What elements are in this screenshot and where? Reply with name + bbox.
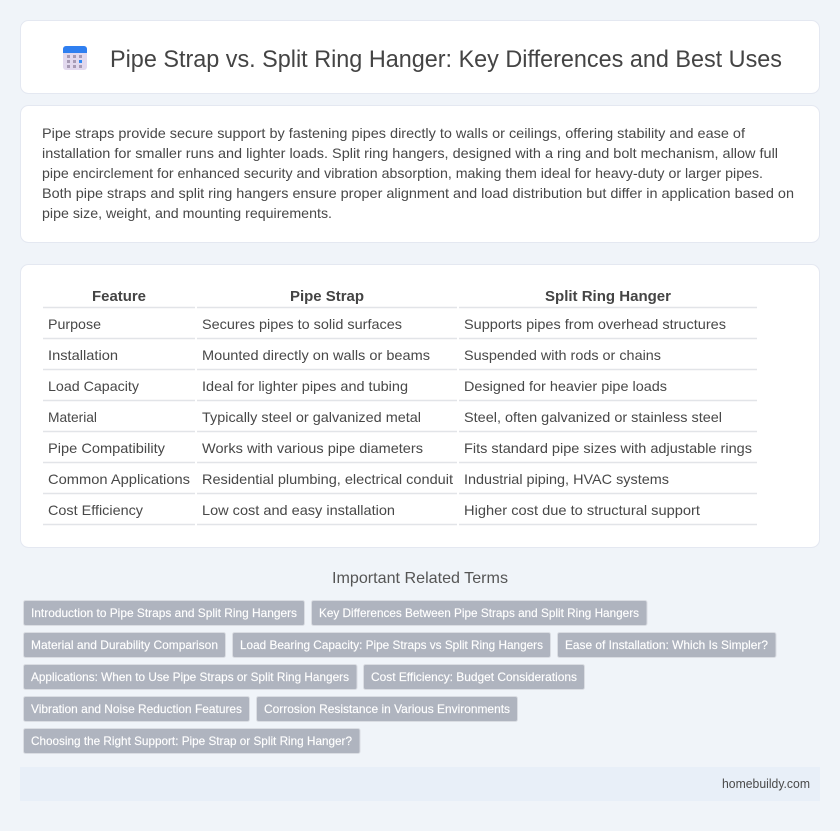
table row: material: Material xyxy=(48,409,97,425)
table row: installation: Installation xyxy=(48,347,118,363)
related term tags: Ease of Installation: Which Is Simpler? xyxy=(565,638,768,652)
table row: pipe compatibility: Pipe Compatibility xyxy=(48,440,165,456)
table row: material: Typically steel or galvanized metal xyxy=(202,409,421,425)
table row: pipe compatibility: Fits standard pipe sizes with adjustable rings xyxy=(464,440,752,456)
table row: common applications: Common Applications xyxy=(48,471,190,487)
table row: pipe compatibility xyxy=(48,440,752,456)
footer xyxy=(20,767,820,801)
icon: calendar xyxy=(63,46,87,70)
related term tags: Introduction to Pipe Straps and Split Ring Hangers xyxy=(31,606,297,620)
related term tags: Load Bearing Capacity: Pipe Straps vs Split Ring Hangers xyxy=(240,638,543,652)
title panel xyxy=(20,20,820,94)
related term tags: Cost Efficiency: Budget Considerations xyxy=(371,670,577,684)
table row: common applications xyxy=(48,471,669,487)
related term tags: Choosing the Right Support: Pipe Strap or Split Ring Hanger? xyxy=(31,734,352,748)
table row: material xyxy=(48,409,722,425)
table row: load capacity: Ideal for lighter pipes and tubing xyxy=(202,378,408,394)
table row: common applications: Residential plumbing, electrical conduit xyxy=(202,471,453,487)
table row: purpose xyxy=(48,316,726,332)
table header xyxy=(92,288,671,305)
table row: installation: Mounted directly on walls or beams xyxy=(202,347,430,363)
text block: introduction paragraph: pipe encirclement for enhanced security and vibration absorption, making them ideal for heavy-duty or larger pipes. xyxy=(42,165,763,181)
text block: introduction paragraph: pipe size, weight, and mounting requirements. xyxy=(42,205,332,221)
text block: introduction paragraph: installation for smaller runs and lighter loads. Split ring hangers, designed with a ring and bolt mechanism, allow full xyxy=(42,145,778,161)
table row: purpose: Purpose xyxy=(48,316,101,332)
table row: installation xyxy=(48,347,661,363)
table row: material: Steel, often galvanized or stainless steel xyxy=(464,409,722,425)
table row: common applications: Industrial piping, HVAC systems xyxy=(464,471,669,487)
table header: Pipe Strap xyxy=(290,288,364,305)
panel: introduction xyxy=(20,106,820,242)
related term tags: Key Differences Between Pipe Straps and Split Ring Hangers xyxy=(319,606,639,620)
table row: cost efficiency: Cost Efficiency xyxy=(48,502,143,518)
table header: Split Ring Hanger xyxy=(545,288,671,305)
table header: Feature xyxy=(92,288,146,305)
table row: cost efficiency: Higher cost due to structural support xyxy=(464,502,700,518)
table row: cost efficiency: Low cost and easy installation xyxy=(202,502,395,518)
heading: important related terms: Important Related Terms xyxy=(332,570,508,587)
table row: installation: Suspended with rods or chains xyxy=(464,347,661,363)
table row: purpose: Supports pipes from overhead structures xyxy=(464,316,726,332)
related term tags: Applications: When to Use Pipe Straps or Split Ring Hangers xyxy=(31,670,349,684)
text block: introduction paragraph xyxy=(42,125,794,221)
text block: introduction paragraph: Pipe straps provide secure support by fastening pipes directly to walls or ceilings, offering stability and ease of xyxy=(42,125,745,141)
table row: load capacity: Load Capacity xyxy=(48,378,139,394)
related term tags xyxy=(24,600,776,754)
table row: cost efficiency xyxy=(48,502,700,518)
related term tags: Vibration and Noise Reduction Features xyxy=(31,702,242,716)
related term tags: Corrosion Resistance in Various Environments xyxy=(264,702,510,716)
table row: pipe compatibility: Works with various pipe diameters xyxy=(202,440,423,456)
table row: load capacity xyxy=(48,378,667,394)
table row: load capacity: Designed for heavier pipe loads xyxy=(464,378,667,394)
panel: comparison table xyxy=(20,264,820,548)
title: Pipe Strap vs. Split Ring Hanger: Key Differences and Best Uses xyxy=(110,46,782,73)
related term tags: Material and Durability Comparison xyxy=(31,638,218,652)
footer source text: homebuildy.com xyxy=(722,777,810,791)
table row: purpose: Secures pipes to solid surfaces xyxy=(202,316,402,332)
text block: introduction paragraph: Both pipe straps and split ring hangers ensure proper alignment and load distribution but differ in application based on xyxy=(42,185,794,201)
